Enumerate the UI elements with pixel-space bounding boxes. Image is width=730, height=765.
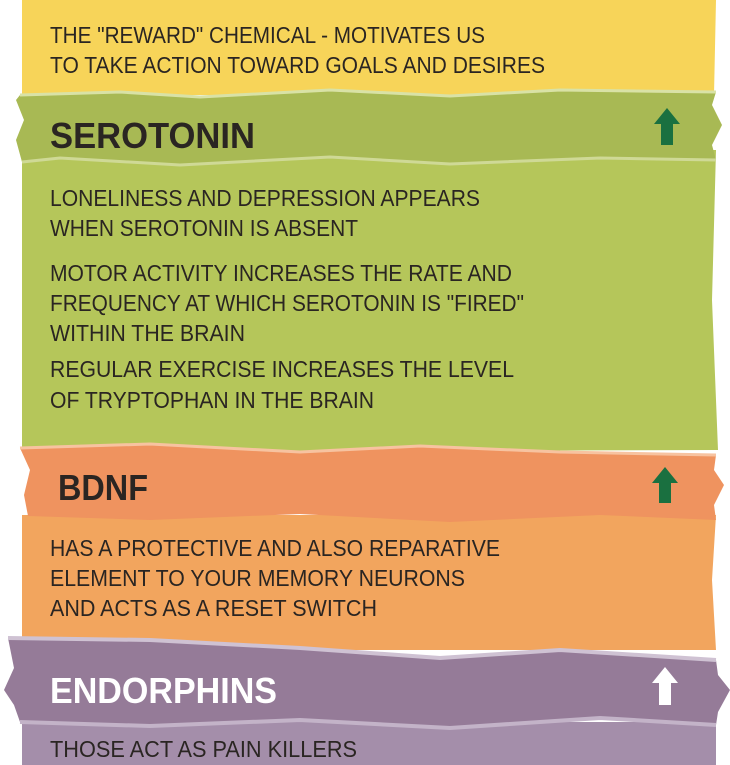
text: serotonin facts [50, 185, 524, 413]
text: serotonin facts: OF TRYPTOPHAN IN THE BRAIN [50, 387, 374, 413]
header: endorphins [4, 638, 730, 728]
header: BDNF: BDNF [58, 467, 148, 508]
text: serotonin facts: WHEN SEROTONIN IS ABSENT [50, 215, 358, 241]
header: endorphins: ENDORPHINS [50, 670, 277, 711]
text: endorphins description: THOSE ACT AS PAIN KILLERS [50, 736, 357, 762]
text: dopamine description: TO TAKE ACTION TOWARD GOALS AND DESIRES [50, 52, 545, 78]
text: serotonin facts: WITHIN THE BRAIN [50, 320, 245, 346]
text: serotonin facts: REGULAR EXERCISE INCREASES THE LEVEL [50, 356, 514, 382]
text: BDNF description [50, 535, 500, 621]
header: serotonin: SEROTONIN [50, 115, 255, 156]
icon: green up arrow [652, 467, 678, 503]
header: BDNF [20, 444, 724, 522]
panel: endorphins body [22, 722, 716, 765]
text: serotonin facts: MOTOR ACTIVITY INCREASES THE RATE AND [50, 260, 512, 286]
panel: dopamine body [22, 0, 716, 95]
text: dopamine description [50, 22, 545, 78]
panel: serotonin body [22, 150, 718, 452]
text: BDNF description: HAS A PROTECTIVE AND ALSO REPARATIVE [50, 535, 500, 561]
text: serotonin facts: FREQUENCY AT WHICH SEROTONIN IS "FIRED" [50, 290, 524, 316]
text: BDNF description: ELEMENT TO YOUR MEMORY NEURONS [50, 565, 465, 591]
icon: white up arrow [652, 667, 678, 705]
header: serotonin [16, 90, 722, 165]
text: serotonin facts: LONELINESS AND DEPRESSION APPEARS [50, 185, 480, 211]
text: BDNF description: AND ACTS AS A RESET SWITCH [50, 595, 377, 621]
panel: BDNF body [22, 515, 716, 650]
text: dopamine description: THE "REWARD" CHEMICAL - MOTIVATES US [50, 22, 485, 48]
icon: green up arrow [654, 108, 680, 145]
